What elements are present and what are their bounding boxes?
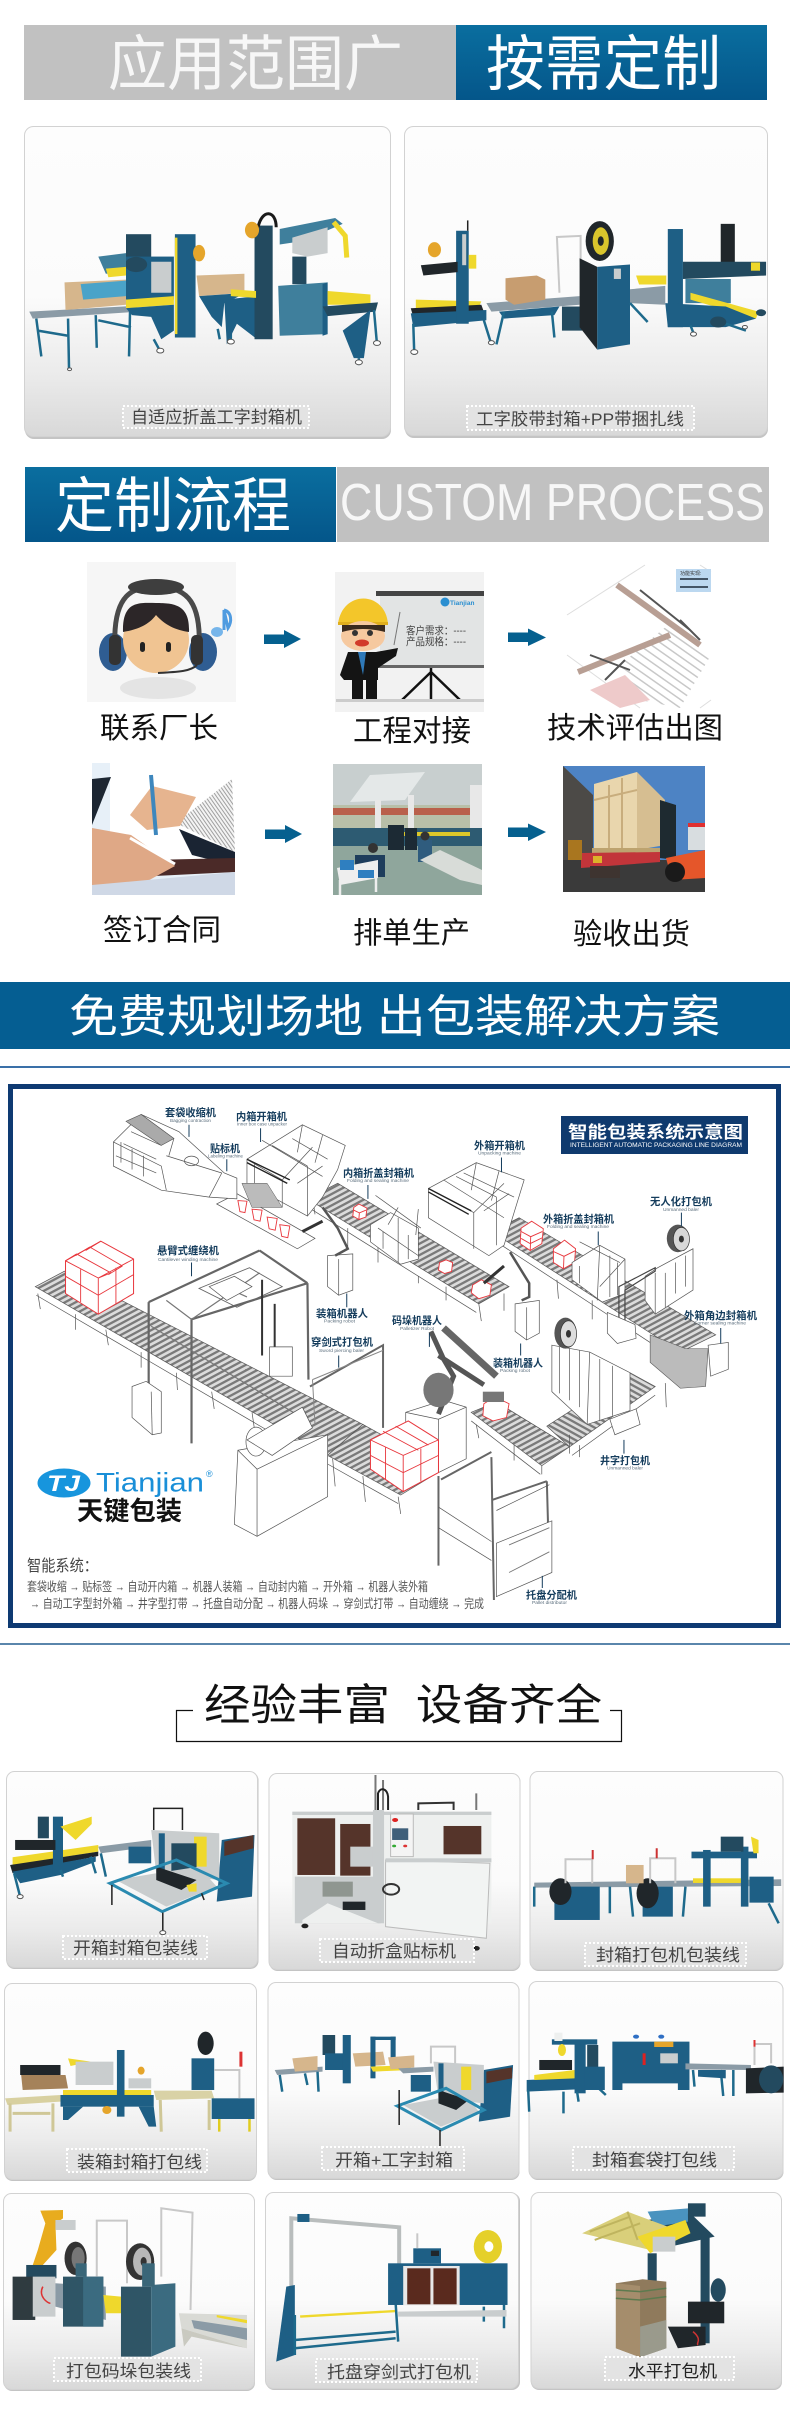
process step: contact the factory: [87, 562, 236, 745]
step label: 签订合同: [103, 914, 221, 947]
machine labels: 外箱折盖封箱机: [543, 1212, 614, 1226]
machine labels: 悬臂式缠绕机: [157, 1244, 219, 1257]
machine labels: Folding and sealing machine: [347, 1178, 410, 1183]
panel: sealing, bagging, strapping line: [527, 1982, 784, 2180]
caption: 自动折盒贴标机: [332, 1942, 456, 1961]
machine labels: Packing robot: [500, 1368, 531, 1373]
title plate: [561, 1116, 748, 1154]
panel: pallet sword-type strapping machine: [266, 2192, 520, 2390]
heading: experienced, complete equipment: [176, 1682, 622, 1742]
icon: layout drawing: 功能实现:: [680, 570, 701, 577]
logo: Tianjian: TJ: [47, 1471, 81, 1496]
caption: 工字胶带封箱+PP带捆扎线: [476, 410, 684, 429]
logo: Tianjian: 天键包装: [77, 1496, 182, 1526]
caption: 封箱套袋打包线: [592, 2151, 717, 2170]
arrow: [264, 630, 301, 648]
machine labels: Bagging contraction: [170, 1118, 212, 1123]
title plate: 智能包装系统示意图: [568, 1122, 743, 1142]
system flow text: 智能系统：: [27, 1557, 98, 1575]
machine labels: Folding and sealing machine: [547, 1224, 610, 1229]
arrow: [508, 824, 546, 841]
system flow text: → 自动工字型封外箱 → 井字型打带 → 托盘自动分配 → 机器人码垛 → 穿剑式打带 → 自动缠绕 → 完成: [30, 1596, 484, 1611]
machine labels: 井字打包机: [600, 1454, 650, 1467]
logo: Tianjian: Tianjian: [96, 1468, 204, 1498]
machine labels: Labeling machine: [208, 1154, 243, 1158]
machine labels: 内箱开箱机: [236, 1110, 287, 1123]
caption: 装箱封箱打包线: [77, 2153, 202, 2172]
machine: [582, 2203, 726, 2357]
panel: carton opening plus H-type sealing: [268, 1982, 520, 2180]
machine labels: 外箱开箱机: [474, 1139, 525, 1152]
machine labels: 内箱折盖封箱机: [343, 1166, 414, 1180]
icon: engineer presenting: [335, 572, 484, 712]
machine: [13, 2208, 247, 2357]
icon: layout drawing: [567, 565, 711, 708]
machine: [10, 1808, 255, 1935]
machine labels: Cantilever winding machine: [158, 1257, 219, 1262]
panel: automatic box folding and labeling: [269, 1774, 520, 1971]
panel: adaptive carton sealer: [24, 126, 391, 439]
machine: [292, 1775, 491, 1951]
machine labels: 无人化打包机: [650, 1195, 712, 1208]
icon: headset avatar: [87, 562, 236, 702]
panel: strapping and palletizing line: [4, 2194, 255, 2391]
caption: 打包码垛包装线: [66, 2362, 191, 2381]
logo: Tianjian: [38, 1468, 213, 1526]
machine labels: 装箱机器人: [316, 1307, 368, 1320]
machine labels: Palletizer Robot: [400, 1326, 435, 1331]
caption: 自适应折盖工字封箱机: [131, 408, 302, 427]
machine labels: Unmanned baler: [607, 1466, 644, 1470]
title plate: INTELLIGENT AUTOMATIC PACKAGING LINE DIAGRAM: [570, 1142, 742, 1149]
machine labels: Corner sealing machine: [694, 1320, 747, 1326]
machine labels: Inner box case unpacker: [237, 1122, 288, 1126]
banner: application range / custom: 应用范围广: [108, 31, 403, 98]
caption: [63, 1936, 207, 1959]
panel: intelligent packaging system diagram: [10, 1086, 778, 1626]
machine labels: 码垛机器人: [392, 1314, 442, 1327]
machine labels: Packing robot: [324, 1318, 356, 1324]
panel: carton opening and sealing line: [6, 1772, 258, 1969]
photo: signing contract: [92, 763, 235, 895]
banner: custom process: [25, 467, 769, 542]
panel: carton sealing and strapping line: [530, 1772, 784, 1971]
machine labels: [157, 1106, 757, 1605]
machine labels: Unpacking machine: [478, 1150, 522, 1156]
process step: technical evaluation drawing: [547, 565, 723, 745]
step label: 排单生产: [353, 917, 470, 950]
step label: 技术评估出图: [547, 712, 723, 745]
process step: engineering meeting: [335, 572, 484, 748]
step label: 工程对接: [353, 715, 471, 748]
icon: engineer presenting: 产品规格：----: [406, 635, 466, 648]
arrow: [508, 628, 546, 646]
process step: production scheduling: [333, 764, 482, 950]
machine labels: Sword piercing baler: [319, 1348, 365, 1353]
machine: [275, 2035, 513, 2146]
system flow text: 套袋收缩 → 贴标签 → 自动开内箱 → 机器人装箱 → 自动封内箱 → 开外箱 → 机器人装外箱: [27, 1579, 428, 1594]
icon: engineer presenting: Tianjian: [450, 600, 474, 607]
caption: [605, 2357, 734, 2381]
machine labels: 托盘分配机: [526, 1588, 577, 1602]
caption: [54, 2358, 201, 2381]
machine: carton sealer pair: [29, 214, 381, 371]
machine labels: Pallet distributor: [532, 1600, 568, 1605]
machine labels: Unmanned baler: [663, 1207, 700, 1212]
banner: application range / custom: 按需定制: [486, 31, 721, 98]
machine: [276, 2214, 508, 2362]
step label: 验收出货: [573, 918, 690, 951]
logo: Tianjian: ®: [206, 1469, 213, 1479]
machine labels: 外箱角边封箱机: [684, 1309, 757, 1322]
caption: [320, 1939, 474, 1962]
machine: [5, 2032, 255, 2132]
heading: experienced, complete equipment: 经验丰富 设备齐全: [204, 1682, 602, 1730]
panel: tape sealer and PP strapping line: [404, 126, 768, 438]
machine labels: 套袋收缩机: [165, 1106, 216, 1119]
banner: custom process: 定制流程: [55, 473, 291, 540]
caption: 封箱打包机包装线: [596, 1946, 740, 1965]
caption: 开箱+工字封箱: [335, 2151, 453, 2170]
caption: [573, 2147, 734, 2170]
step label: 联系厂长: [100, 712, 218, 745]
caption: [322, 2147, 464, 2170]
panel: packing, sealing, strapping line: [4, 1984, 256, 2181]
process step: sign contract: [92, 763, 235, 947]
machine labels: 装箱机器人: [493, 1356, 543, 1370]
machine: sealing and strapping line: [411, 220, 766, 355]
photo: factory floor: [333, 764, 482, 895]
line drawing: packaging line: [35, 1114, 728, 1600]
caption: 托盘穿剑式打包机: [327, 2363, 471, 2382]
caption: 水平打包机: [628, 2362, 717, 2381]
panel: horizontal strapping machine: [531, 2192, 782, 2390]
caption: 开箱封箱包装线: [73, 1939, 198, 1958]
machine: [534, 1837, 781, 1923]
banner: free site planning: 免费规划场地 出包装解决方案: [69, 991, 720, 1042]
machine labels: 穿剑式打包机: [311, 1336, 373, 1348]
machine: [527, 2033, 784, 2113]
caption: [585, 1943, 746, 1966]
system flow text: [27, 1557, 484, 1611]
caption: [316, 2359, 477, 2382]
machine labels: 贴标机: [210, 1142, 240, 1155]
banner: free site planning: [0, 982, 790, 1049]
photo: crate on truck: [563, 766, 705, 892]
process step: acceptance and shipping: [563, 766, 705, 951]
arrow: [265, 825, 302, 843]
icon: engineer presenting: 客户需求：----: [406, 624, 466, 637]
banner: application range / custom: [24, 25, 767, 100]
